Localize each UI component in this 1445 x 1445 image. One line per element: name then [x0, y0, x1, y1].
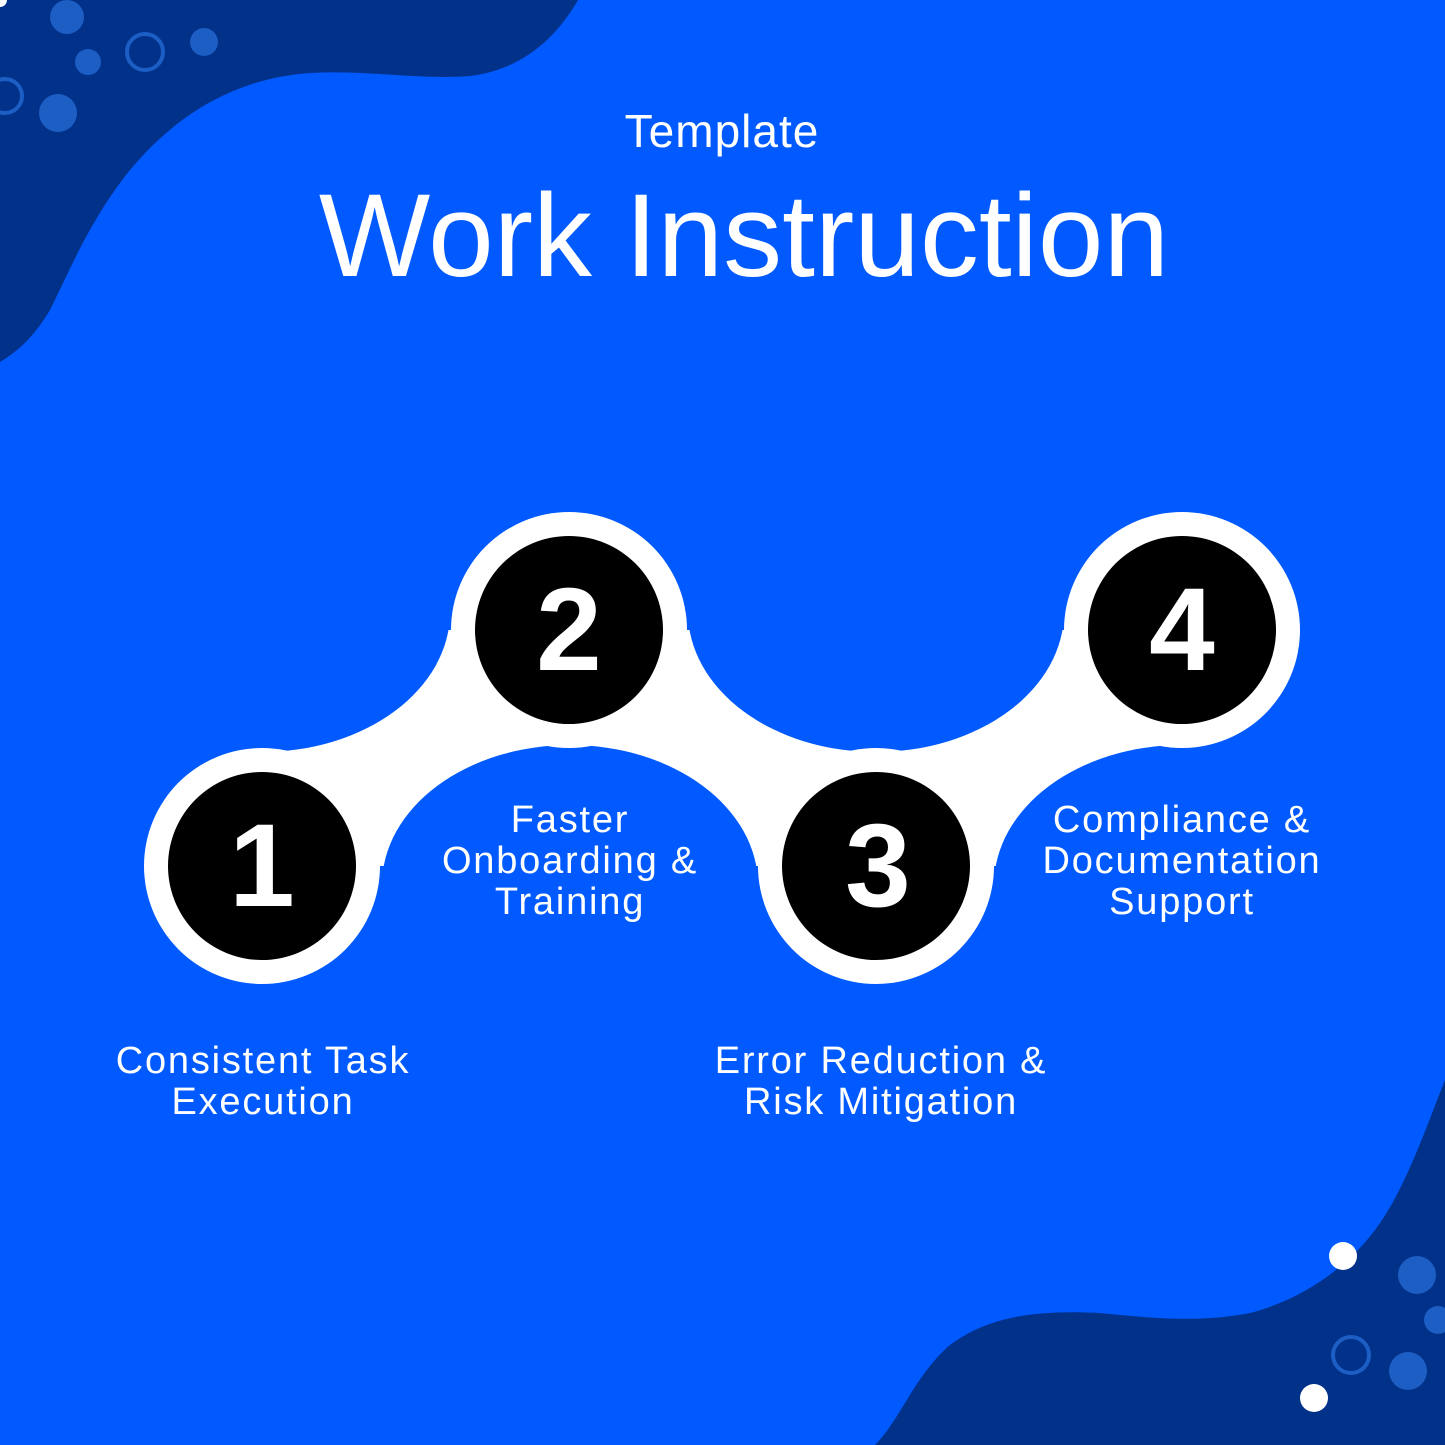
label 1: Consistent Task: [116, 1040, 410, 1082]
label 3: Error Reduction &: [715, 1040, 1047, 1082]
step 3 circle: 3: [845, 800, 911, 932]
label 4: Compliance &: [1053, 799, 1311, 841]
step 2 circle: 2: [536, 564, 602, 696]
top-left dark blob: [0, 0, 578, 362]
bottom-right dark blob: [875, 1080, 1445, 1445]
label 4: Documentation: [1042, 840, 1322, 882]
title: Work Instruction: [319, 170, 1169, 302]
step 4 circle: 4: [1149, 564, 1215, 696]
process snake: [74, 352, 1370, 1145]
label 3: Risk Mitigation: [744, 1081, 1018, 1123]
step 2 circle: [451, 512, 687, 748]
subtitle: Template: [625, 105, 819, 157]
label 2: Training: [495, 881, 645, 923]
label 4: Support: [1109, 881, 1255, 923]
step 4 circle: [1064, 512, 1300, 748]
label 2: Onboarding &: [442, 840, 698, 882]
label 2: Faster: [511, 799, 629, 841]
step 3 circle: [758, 748, 994, 984]
step 1 circle: [144, 748, 380, 984]
step 1 circle: 1: [229, 800, 295, 932]
label 1: Execution: [171, 1081, 355, 1123]
